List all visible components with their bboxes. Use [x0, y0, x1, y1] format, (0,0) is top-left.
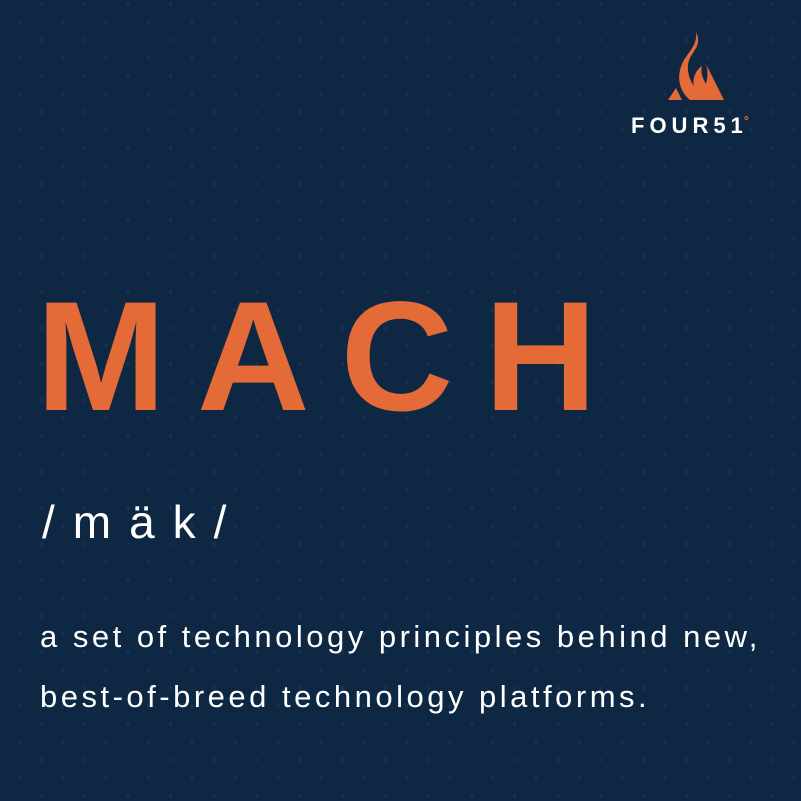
definition text: [40, 619, 761, 714]
icon: flame: [668, 32, 724, 100]
definition text: best-of-breed technology platforms.: [40, 679, 650, 714]
pronunciation: /mäk/: [42, 496, 244, 548]
title: MACH: [36, 270, 628, 444]
logo wordmark: FOUR51°: [631, 113, 749, 138]
logo: [631, 32, 749, 138]
definition text: a set of technology principles behind new,: [40, 619, 761, 654]
